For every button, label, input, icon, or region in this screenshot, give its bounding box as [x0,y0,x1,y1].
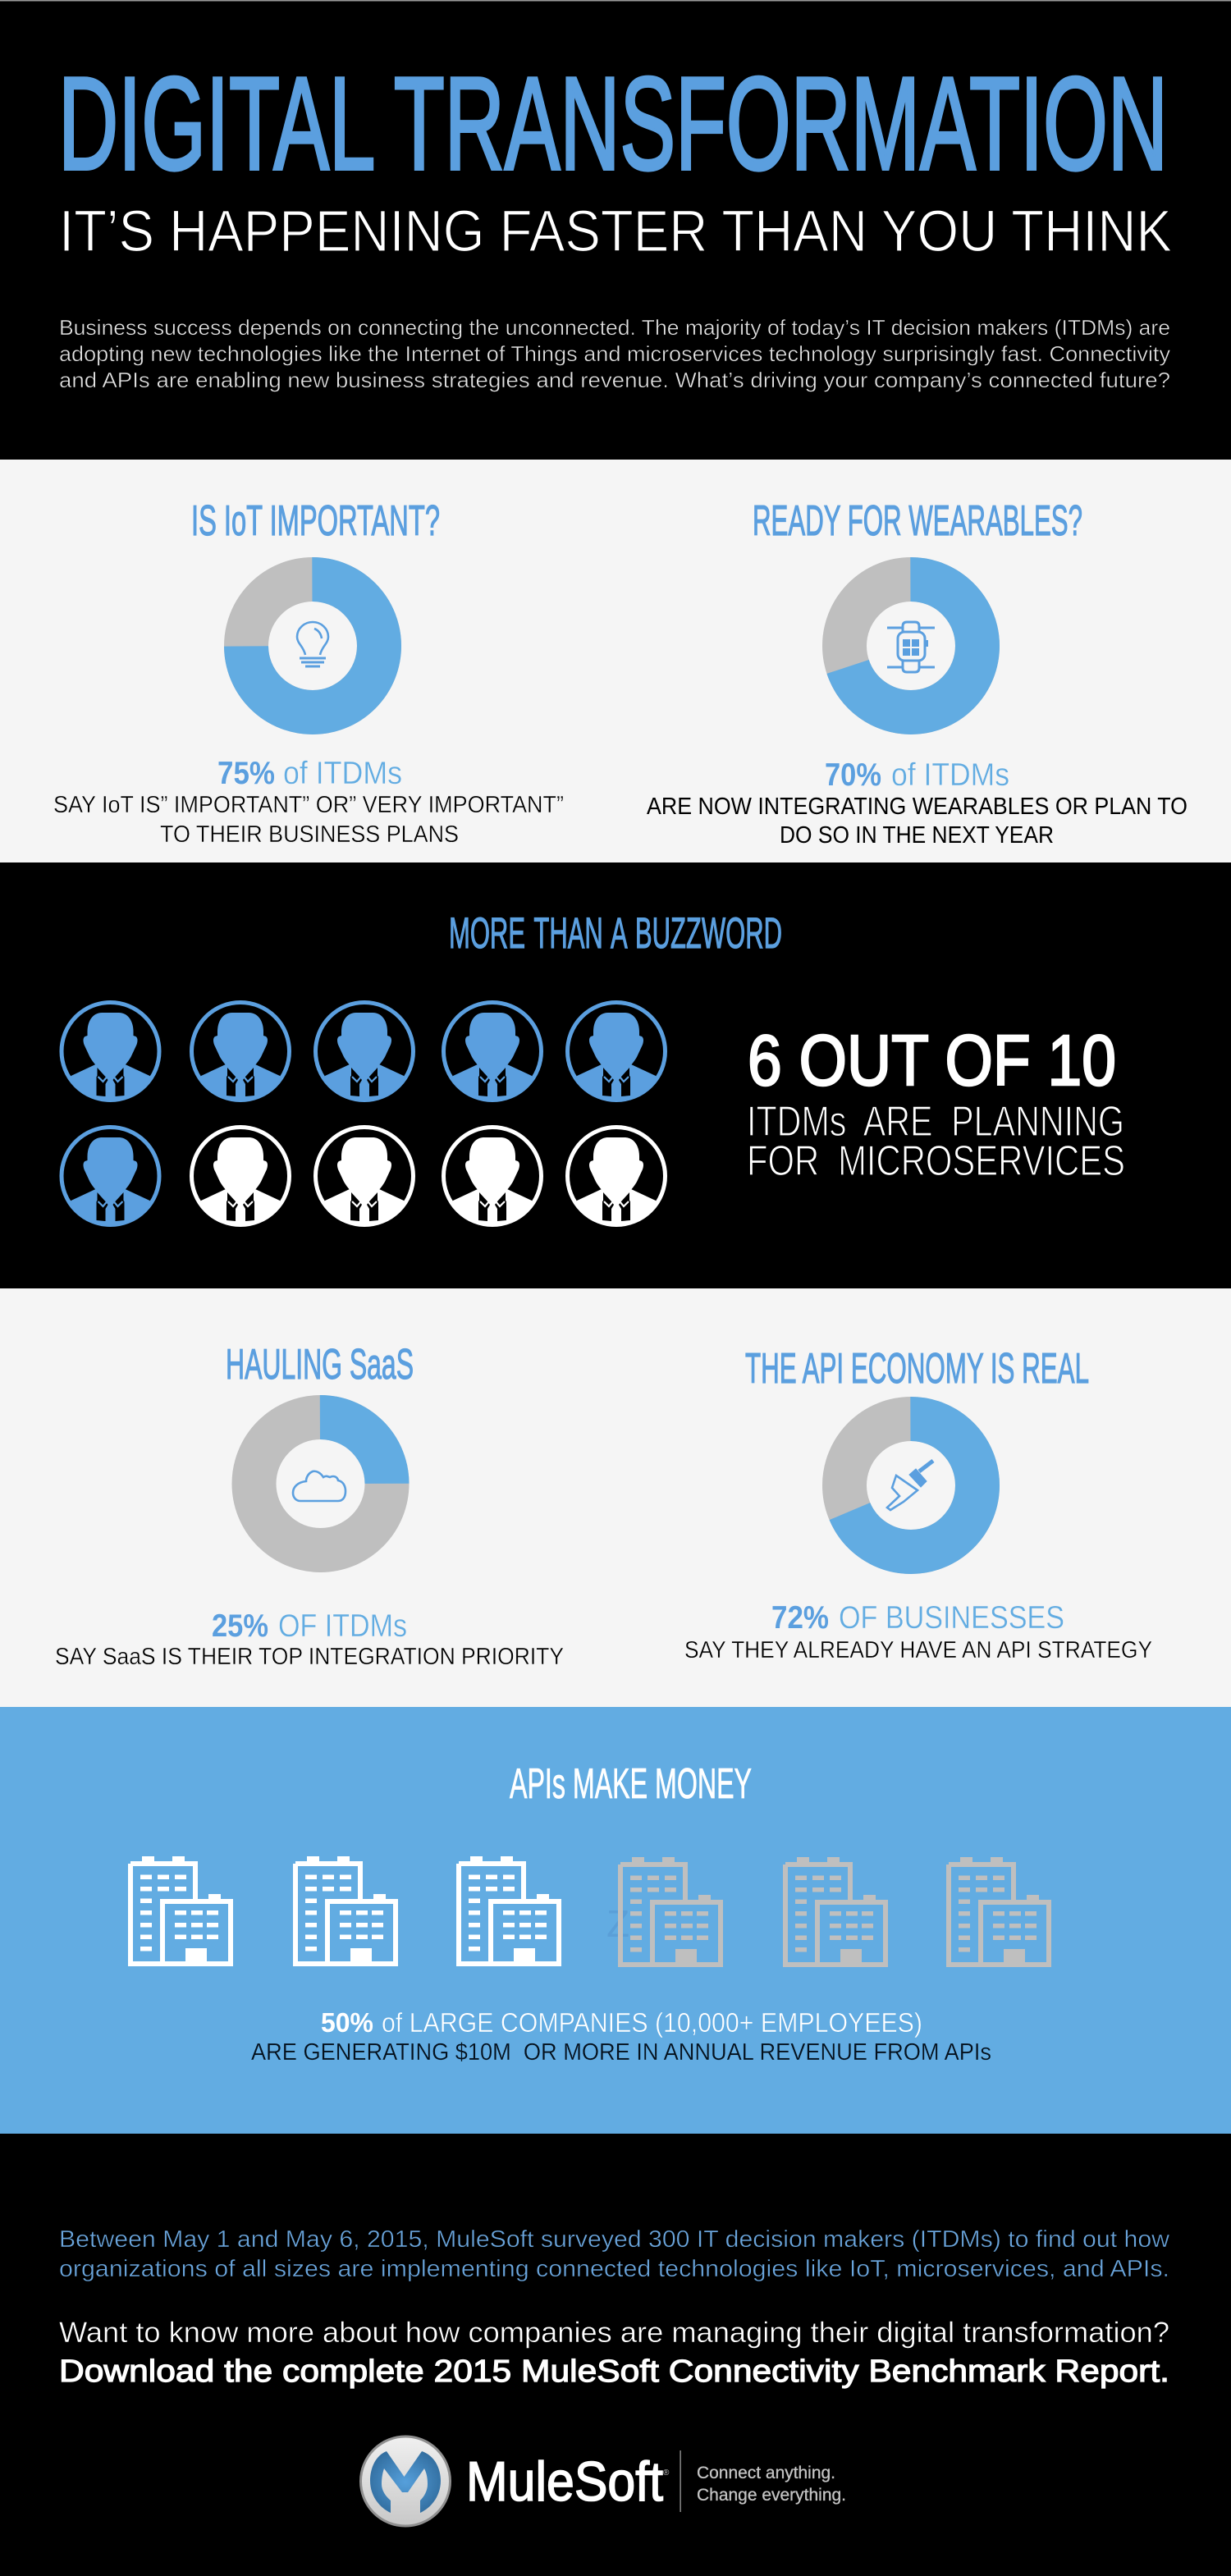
text: call to action: Download the complete 2015 MuleSoft Connectivity Benchmark Report. [59,2354,1169,2389]
donut: 25 percent [254,1417,387,1550]
text: ITDMs are planning for microservices: FOR MICROSERVICES [747,1137,1125,1185]
text: wearables description: ARE NOW INTEGRATING WEARABLES OR PLAN TO [647,794,1188,820]
heading: is IoT important: IS IoT IMPORTANT? [191,497,440,545]
icon: light bulb [297,622,328,666]
stat: 72 percent of businesses [771,1600,1064,1636]
stat: 25 percent of ITDMs: OF ITDMs [278,1608,407,1644]
stat: 6 out of 10: 6 OUT OF 10 [748,1021,1116,1100]
text: SaaS description: SAY SaaS IS THEIR TOP INTEGRATION PRIORITY [55,1644,564,1670]
people icons: 6 of 10 highlighted [59,1003,667,1227]
intro paragraph: adopting new technologies like the Internet of Things and microservices technology surprisingly fast. Connectivity [59,341,1170,366]
stat: 50 percent of large companies: of LARGE COMPANIES (10,000+ EMPLOYEES) [382,2007,922,2038]
heading: APIs make money: APIs MAKE MONEY [510,1760,752,1808]
tagline: Connect anything. [697,2464,835,2482]
stat: 72 percent of businesses: 72% [771,1600,829,1636]
text: IoT description: TO THEIR BUSINESS PLANS [160,821,459,848]
stat: 70 percent of ITDMs: of ITDMs [891,757,1009,793]
tagline [697,2464,846,2505]
intro paragraph: and APIs are enabling new business strategies and revenue. What’s driving your company’s connected future? [59,368,1170,392]
donut: 72 percent [844,1419,977,1552]
panel: footer [0,2134,1231,2576]
panel: microservices [0,862,1231,1288]
heading: more than a buzzword: MORE THAN A BUZZWORD [449,909,782,958]
text: revenue description: ARE GENERATING $10M OR MORE IN ANNUAL REVENUE FROM APIs [251,2039,991,2066]
icon: smart watch [887,622,935,672]
text: ITDMs are planning for microservices [747,1098,1125,1185]
stat: 25 percent of ITDMs: 25% [212,1608,268,1644]
intro paragraph [59,315,1170,392]
stat: 72 percent of businesses: OF BUSINESSES [839,1600,1064,1636]
text: ITDMs are planning for microservices: ITDMs ARE PLANNING [747,1098,1124,1146]
text: call to action: Want to know more about how companies are managing their digital transformation? [59,2317,1169,2349]
donut: 70 percent [844,579,977,712]
stat: 70 percent of ITDMs [825,757,1009,793]
icon: plug [887,1461,933,1510]
intro paragraph: Business success depends on connecting the unconnected. The majority of today’s IT decision makers (ITDMs) are [59,315,1170,340]
text: survey methodology: Between May 1 and May 6, 2015, MuleSoft surveyed 300 IT decision makers (ITDMs) to find out how [59,2226,1170,2253]
stat: 75 percent of ITDMs [217,756,402,791]
stat: 50 percent of large companies: 50% [321,2007,373,2038]
text: wearables description [647,794,1188,849]
icon row: buildings [130,1856,1049,1967]
icon: cloud [293,1471,346,1501]
panel: header [0,0,1231,460]
stat: 70 percent of ITDMs: 70% [825,757,881,793]
donut: 75 percent [246,579,379,712]
stat: 25 percent of ITDMs [212,1608,407,1644]
panel: IoT and wearables [0,460,1231,862]
tagline: Change everything. [697,2486,846,2505]
text: API description: SAY THEY ALREADY HAVE AN API STRATEGY [684,1637,1152,1663]
panel: SaaS and API economy [0,1288,1231,1707]
logo: MuleSoft: ® [663,2468,670,2478]
text: wearables description: DO SO IN THE NEXT YEAR [780,822,1054,849]
text: IoT description: SAY IoT IS” IMPORTANT” OR” VERY IMPORTANT” [53,792,564,818]
text: call to action [59,2317,1169,2389]
heading: hauling SaaS: HAULING SaaS [226,1341,414,1389]
icon row: buildings: Z [606,1902,629,1945]
panel: APIs make money [0,1707,1231,2134]
icon: MuleSoft mark [361,2436,450,2526]
text: IoT description [53,792,564,848]
stat: 75 percent of ITDMs: of ITDMs [283,756,402,791]
stat: 75 percent of ITDMs: 75% [217,756,275,791]
text: survey methodology: organizations of all sizes are implementing connected technologies like IoT, microservices, and APIs. [59,2256,1169,2282]
text: survey methodology [59,2226,1170,2282]
logo: MuleSoft [361,2436,846,2526]
wordmark: MuleSoft [466,2450,663,2513]
